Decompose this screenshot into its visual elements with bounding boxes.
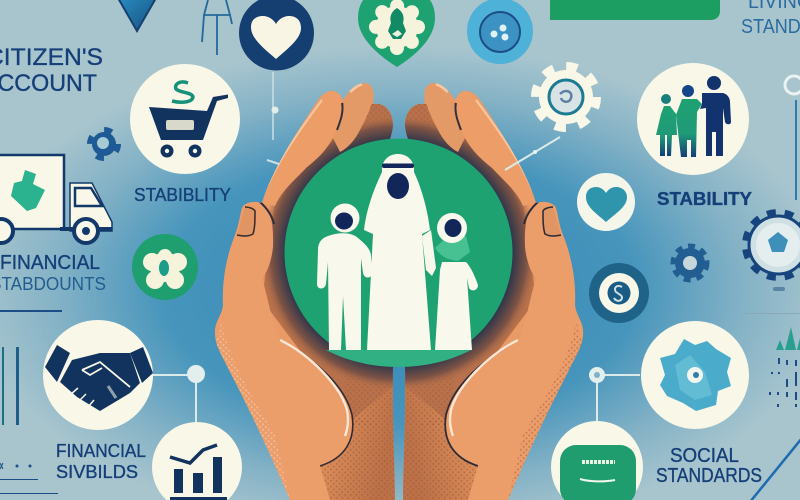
label: Stability right: STABILITY — [657, 189, 752, 209]
connector: dotted line — [505, 137, 560, 170]
icon: bulb top right — [785, 76, 800, 200]
icon: green pin badge — [358, 0, 435, 67]
rule and bars left — [0, 310, 62, 425]
mini chart right — [743, 313, 800, 407]
label: Financial Sivbilds: FINANCIAL — [56, 441, 146, 461]
figure: child left — [317, 204, 372, 350]
icon: growth chart — [152, 422, 242, 500]
label: Financial Sivbilds — [56, 441, 146, 482]
label: Social Standards: SOCIAL — [670, 445, 739, 467]
icon: spiky blue blob — [641, 321, 749, 429]
icon: blue circle — [467, 0, 533, 64]
icon: shopping cart — [130, 64, 240, 174]
icon: small gear — [90, 130, 118, 158]
icon: green flag circle — [551, 421, 643, 500]
label: Financial Stabdounts — [0, 252, 106, 294]
right hand — [402, 83, 584, 500]
connector right — [589, 367, 640, 422]
icon: green flower badge — [132, 234, 198, 300]
icon: easel — [202, 0, 232, 55]
icon: navy heart circle — [239, 0, 314, 70]
icon: dollar badge — [589, 263, 649, 323]
icon: family circle — [637, 63, 749, 175]
icon: teal heart circle — [577, 173, 635, 231]
icon: handshake — [43, 320, 153, 430]
left hand — [214, 83, 395, 500]
heading: Living Standards — [741, 0, 800, 38]
panel: green banner — [550, 0, 720, 20]
label: Financial Stabdounts: FINANCIAL — [0, 252, 100, 274]
connector left — [153, 365, 205, 422]
icon: cream gear — [536, 67, 596, 127]
decorative marks bottom left — [0, 463, 58, 494]
central green circle with family — [284, 138, 512, 367]
label: Social Standards — [656, 445, 762, 487]
connector below heart — [267, 72, 279, 164]
figure: father in thobe — [364, 154, 431, 350]
figure: child right — [422, 213, 478, 350]
label: Financial Sivbilds: SIVBILDS — [56, 462, 138, 482]
icon: large navy gear — [745, 212, 800, 291]
label: Stabiblity left: STABIBLITY — [134, 185, 231, 205]
icon: medium gear — [673, 246, 707, 280]
title: Citizen's Account — [0, 44, 103, 97]
diagonal trend line — [750, 438, 800, 500]
icon: blue triangle — [118, 0, 156, 31]
label: Social Standards: STANDARDS — [656, 465, 762, 487]
icon: delivery truck — [0, 155, 112, 243]
